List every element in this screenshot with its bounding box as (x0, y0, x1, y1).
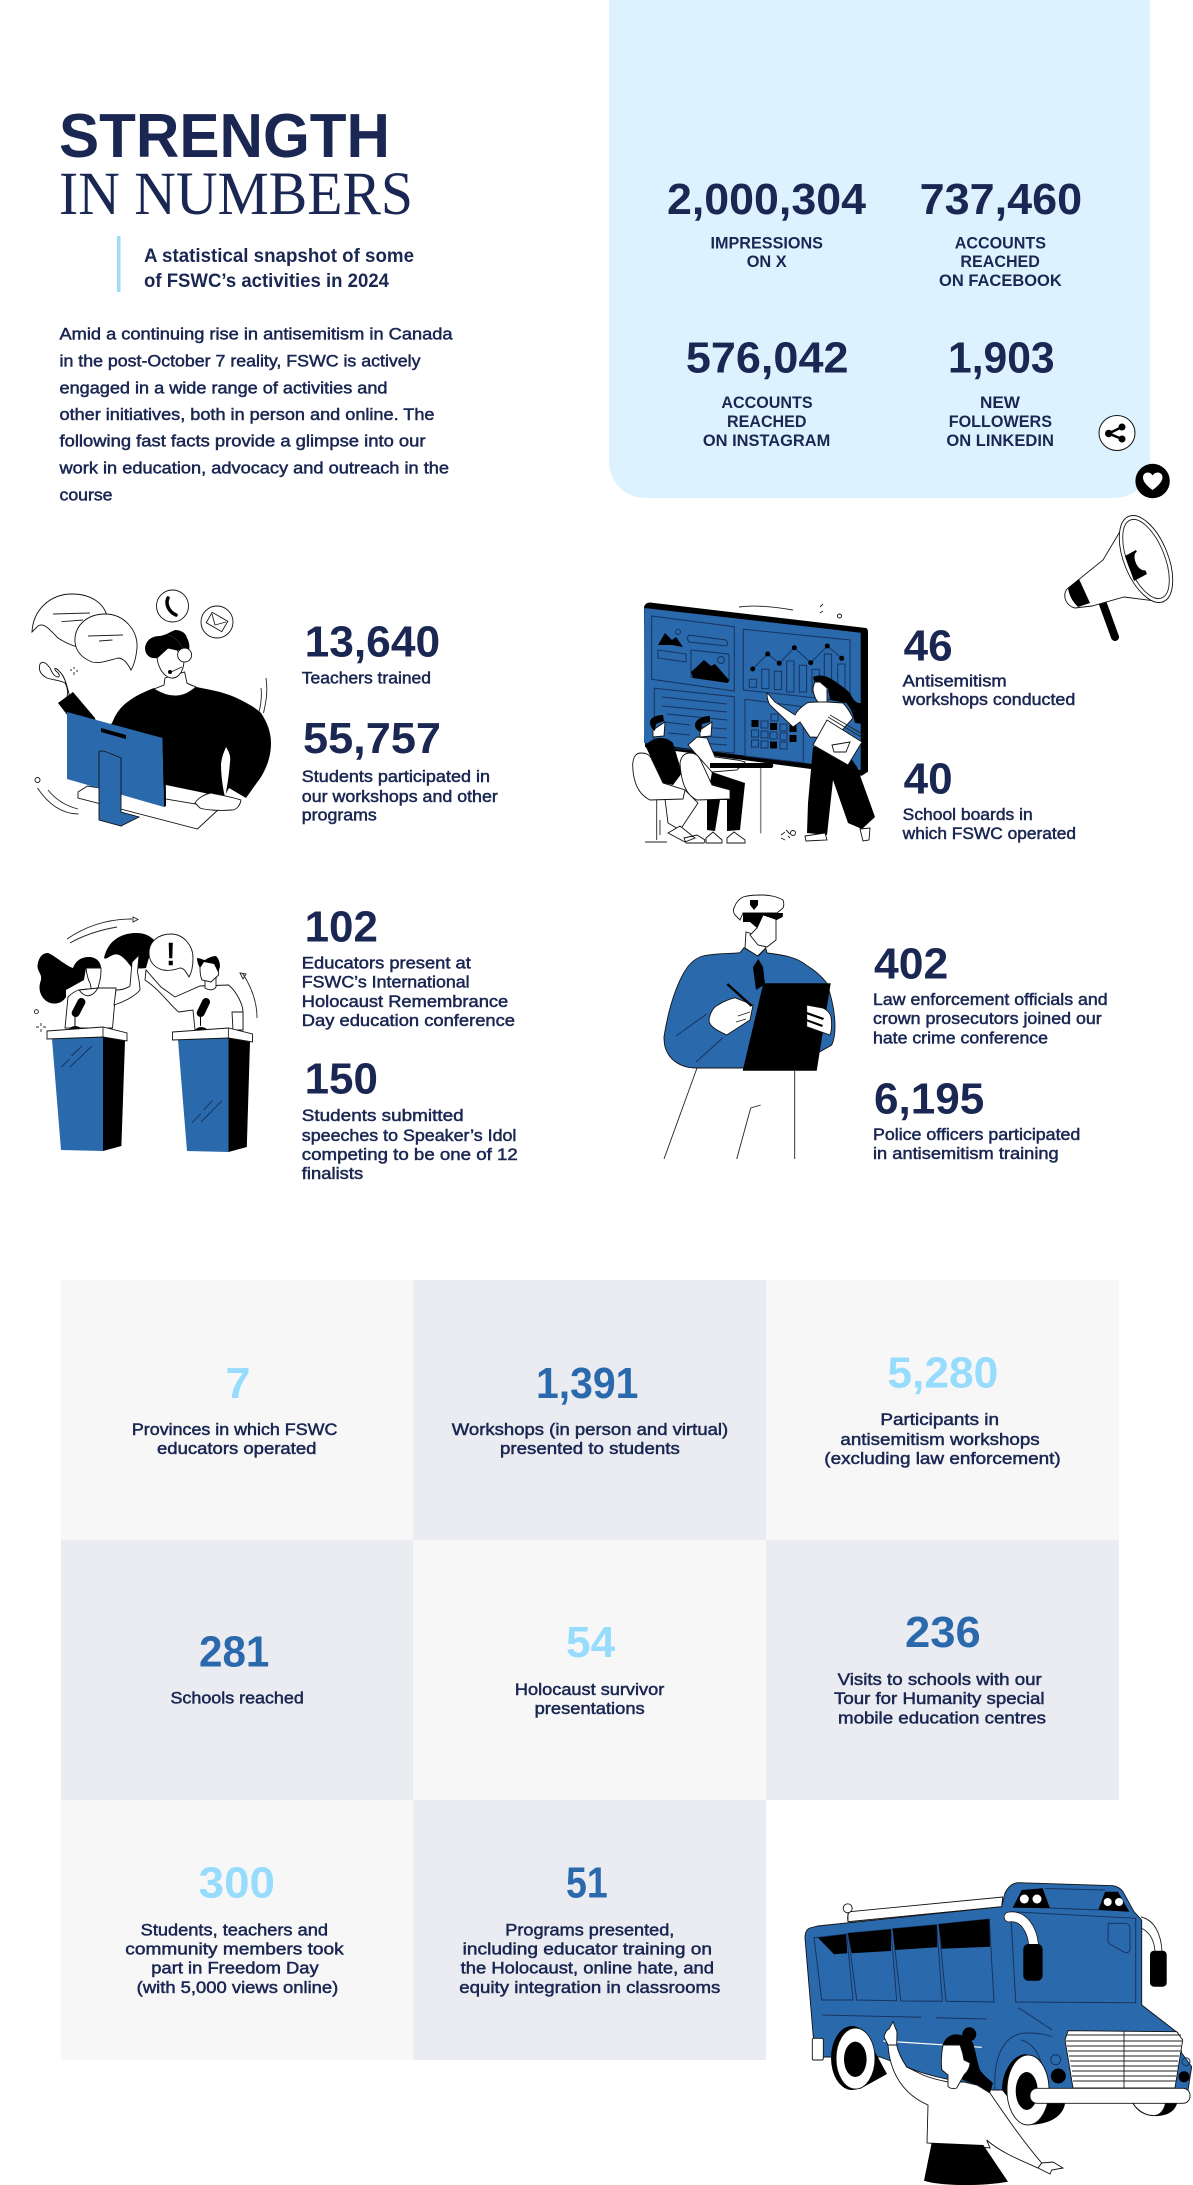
stat: impressions on X: IMPRESSIONS (710, 233, 823, 252)
text: educators and students: Day education conference (302, 1012, 515, 1030)
cell: provinces: educators operated (157, 1440, 316, 1458)
text: teachers and students: 55,757 (303, 714, 441, 763)
text: workshops and school boards: Antisemitism (903, 672, 1007, 690)
stat: accounts reached on Facebook: REACHED (960, 252, 1040, 271)
cell: programs (459, 1858, 720, 1997)
podium left (47, 1027, 127, 1151)
torso (664, 948, 835, 1068)
person (39, 630, 271, 798)
cell: survivor presentations: presentations (535, 1700, 645, 1718)
cell: participants (824, 1348, 1061, 1468)
stat: accounts reached on Instagram: ON INSTAGRAM (703, 431, 830, 450)
cell: provinces (132, 1359, 337, 1458)
cell: survivor presentations (515, 1618, 665, 1718)
illustration: police officer with clipboard (664, 895, 835, 1159)
cell: programs: Programs presented, (505, 1922, 674, 1940)
cell: school visits: Visits to schools with our (838, 1671, 1042, 1689)
panel: statistics grid (61, 1280, 1119, 2060)
tie (753, 959, 765, 990)
text: law enforcement and police: Law enforcement officials and (873, 991, 1108, 1009)
data board (644, 603, 868, 776)
intro paragraph: other initiatives, both in person and online. The (60, 406, 434, 424)
panel: social media stats (609, 0, 1150, 498)
text: law enforcement and police: crown prosecutors joined our (873, 1010, 1102, 1028)
text: workshops and school boards: School boards in (903, 806, 1033, 824)
text: educators and students: finalists (302, 1165, 363, 1183)
text: educators and students: Students submitted (302, 1107, 464, 1125)
roof rack and antenna (843, 1897, 1003, 1922)
near mirror (1009, 1917, 1043, 1981)
front wheel and arch (995, 2033, 1065, 2125)
cell: school visits: 236 (905, 1608, 981, 1657)
icon: phone (156, 590, 188, 622)
rear wheel (812, 2026, 887, 2090)
text: workshops and school boards (902, 622, 1076, 843)
cell: provinces: 7 (226, 1359, 250, 1408)
text: teachers and students: Teachers trained (302, 670, 431, 688)
intro paragraph: engaged in a wide range of activities and (60, 380, 388, 398)
stat: accounts reached on Instagram (686, 334, 848, 450)
stat: accounts reached on Facebook: ON FACEBOOK (939, 271, 1063, 290)
intro paragraph: following fast facts provide a glimpse into our (60, 433, 426, 451)
cell: freedom day: 300 (199, 1858, 275, 1907)
cell: programs: the Holocaust, online hate, and (461, 1960, 714, 1978)
text: educators and students: Educators present at (302, 954, 471, 972)
text: teachers and students: programs (302, 807, 377, 825)
cell: freedom day: part in Freedom Day (151, 1960, 320, 1978)
cell: participants: 5,280 (887, 1348, 998, 1398)
bumper (1030, 2088, 1190, 2103)
stat: impressions on X: 2,000,304 (667, 175, 867, 224)
stat: accounts reached on Facebook: ACCOUNTS (955, 233, 1046, 252)
computer monitor (67, 712, 166, 826)
cell: school visits (834, 1608, 1046, 1728)
keyboard and hand (78, 786, 241, 829)
decorative motion arcs (34, 917, 257, 1032)
text: law enforcement and police: hate crime conference (873, 1030, 1048, 1048)
intro paragraph (58, 326, 453, 505)
intro paragraph: course (60, 487, 112, 505)
podium right (172, 1028, 252, 1152)
intro paragraph: Amid a continuing rise in antisemitism in Canada (60, 326, 453, 344)
cell: freedom day: community members took (125, 1941, 345, 1959)
stat: new followers on LinkedIn (946, 334, 1055, 450)
stat: impressions on X: ON X (747, 252, 787, 271)
text: educators and students: FSWC’s International (302, 973, 470, 991)
text: teachers and students: Students participated in (302, 768, 490, 786)
cell: participants: Participants in (880, 1411, 999, 1429)
bus body (805, 1883, 1192, 2090)
text: law enforcement and police: 402 (874, 940, 948, 989)
text: teachers and students (302, 618, 498, 825)
cell: freedom day: Students, teachers and (141, 1922, 328, 1940)
cell: schools: 281 (199, 1627, 269, 1676)
text: law enforcement and police: 6,195 (874, 1074, 984, 1123)
text: workshops and school boards: workshops conducted (902, 691, 1075, 709)
far mirror (1141, 1917, 1167, 1987)
stat: accounts reached on Instagram: 576,042 (686, 334, 848, 382)
subtitle with accent bar: A statistical snapshot of some (144, 246, 414, 267)
speaker left (38, 933, 154, 1029)
cell: survivor presentations: Holocaust survivor (515, 1681, 665, 1699)
text: law enforcement and police: in antisemitism training (873, 1145, 1059, 1163)
icon: heart (1135, 464, 1170, 498)
stat: accounts reached on Instagram: ACCOUNTS (721, 393, 813, 412)
cell: participants: (excluding law enforcement) (824, 1450, 1061, 1468)
head and cap (733, 895, 784, 956)
stat: new followers on LinkedIn: FOLLOWERS (949, 412, 1052, 431)
text: workshops and school boards: which FSWC operated (902, 825, 1076, 843)
illustration: presenter at data board (633, 603, 875, 843)
stat: accounts reached on Facebook: 737,460 (920, 175, 1082, 224)
speech bubble with exclamation (149, 934, 193, 977)
subtitle with accent bar: of FSWC’s activities in 2024 (144, 271, 389, 292)
speaker right (145, 956, 243, 1030)
cell: freedom day: (with 5,000 views online) (137, 1979, 338, 1997)
text: educators and students: competing to be one of 12 (302, 1146, 518, 1164)
icon: megaphone (1065, 508, 1184, 637)
hands and pen (709, 984, 832, 1035)
cell: programs: equity integration in classrooms (459, 1979, 720, 1997)
title: STRENGTH (59, 102, 390, 171)
stat: impressions on X (667, 175, 867, 271)
presenter (767, 676, 875, 841)
cell: schools (170, 1627, 304, 1708)
cell: workshops: 1,391 (536, 1359, 638, 1408)
illustration: school bus with educator (805, 1883, 1192, 2185)
educator figure (884, 2022, 1063, 2185)
cell: participants: antisemitism workshops (840, 1431, 1040, 1449)
subtitle with accent bar (117, 236, 414, 292)
cell: provinces: Provinces in which FSWC (132, 1421, 337, 1439)
icon: share (1099, 416, 1135, 450)
text: law enforcement and police (873, 940, 1108, 1163)
cell: survivor presentations: 54 (566, 1618, 616, 1667)
cell: programs: 51 (566, 1858, 608, 1907)
intro paragraph: work in education, advocacy and outreach in the (58, 460, 449, 478)
far wheel (1131, 2100, 1178, 2116)
speech bubbles (32, 594, 137, 670)
seated audience (633, 715, 773, 843)
text: educators and students: 150 (305, 1055, 378, 1104)
text: educators and students: 102 (305, 903, 378, 952)
stat: new followers on LinkedIn: NEW (980, 393, 1021, 412)
cell: workshops (452, 1359, 728, 1458)
text: workshops and school boards: 46 (904, 622, 953, 671)
radiator grille (1065, 2031, 1183, 2088)
bus side windows (814, 1919, 1052, 2047)
clipboard (743, 983, 831, 1071)
legs (664, 1068, 795, 1159)
cell: programs: including educator training on (463, 1941, 712, 1959)
cell: school visits: mobile education centres (838, 1710, 1046, 1728)
cell: workshops: Workshops (in person and virtual) (452, 1421, 728, 1439)
illustration: teacher at computer (32, 590, 271, 829)
icon: envelope (201, 606, 233, 638)
headlights (1051, 2055, 1190, 2084)
cell: freedom day (125, 1858, 345, 1997)
stat: new followers on LinkedIn: ON LINKEDIN (946, 431, 1054, 450)
cell: schools: Schools reached (170, 1690, 304, 1708)
cell: workshops: presented to students (500, 1440, 680, 1458)
text: teachers and students: 13,640 (305, 618, 440, 667)
title (59, 102, 413, 228)
text: educators and students: speeches to Speaker’s Idol (302, 1127, 516, 1145)
windshield and roof lights (1011, 1888, 1136, 2003)
text: educators and students: Holocaust Remembrance (302, 993, 508, 1011)
stat: accounts reached on Instagram: REACHED (727, 412, 806, 431)
stat: accounts reached on Facebook (920, 175, 1082, 290)
stat: new followers on LinkedIn: 1,903 (948, 334, 1055, 382)
illustration: speakers at podiums (34, 917, 257, 1152)
text: law enforcement and police: Police officers participated (873, 1126, 1080, 1144)
cell: school visits: Tour for Humanity special (834, 1690, 1045, 1708)
intro paragraph: in the post-October 7 reality, FSWC is actively (60, 353, 421, 371)
text: educators and students (302, 903, 518, 1183)
title: IN NUMBERS (59, 161, 413, 228)
text: workshops and school boards: 40 (904, 754, 953, 803)
text: teachers and students: our workshops and other (302, 788, 498, 806)
